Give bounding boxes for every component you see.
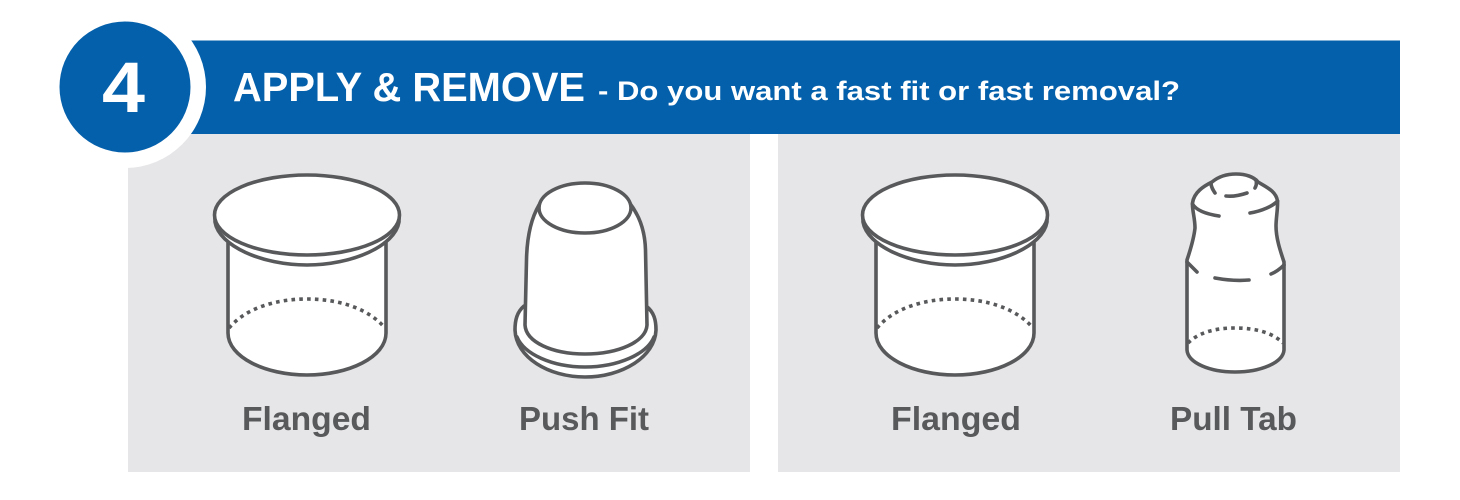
label: push fit: Push Fit: [519, 400, 649, 437]
title: APPLY & REMOVE: [233, 64, 585, 110]
icon: flanged cap: [862, 175, 1048, 375]
panel: right: [778, 134, 1400, 472]
label: flanged: Flanged: [242, 400, 371, 437]
number badge: [44, 6, 206, 168]
icon: flanged cap: [214, 175, 400, 375]
header bar: [180, 40, 1400, 134]
panel: left: [128, 134, 750, 472]
icon: push fit cap: [515, 183, 656, 377]
label: pull tab: Pull Tab: [1170, 400, 1297, 437]
icon: pull tab cap: [1187, 174, 1284, 372]
subtitle: - Do you want a fast fit or fast removal?: [598, 76, 1180, 106]
label: flanged: Flanged: [891, 400, 1021, 437]
number badge: 4: [102, 49, 146, 128]
